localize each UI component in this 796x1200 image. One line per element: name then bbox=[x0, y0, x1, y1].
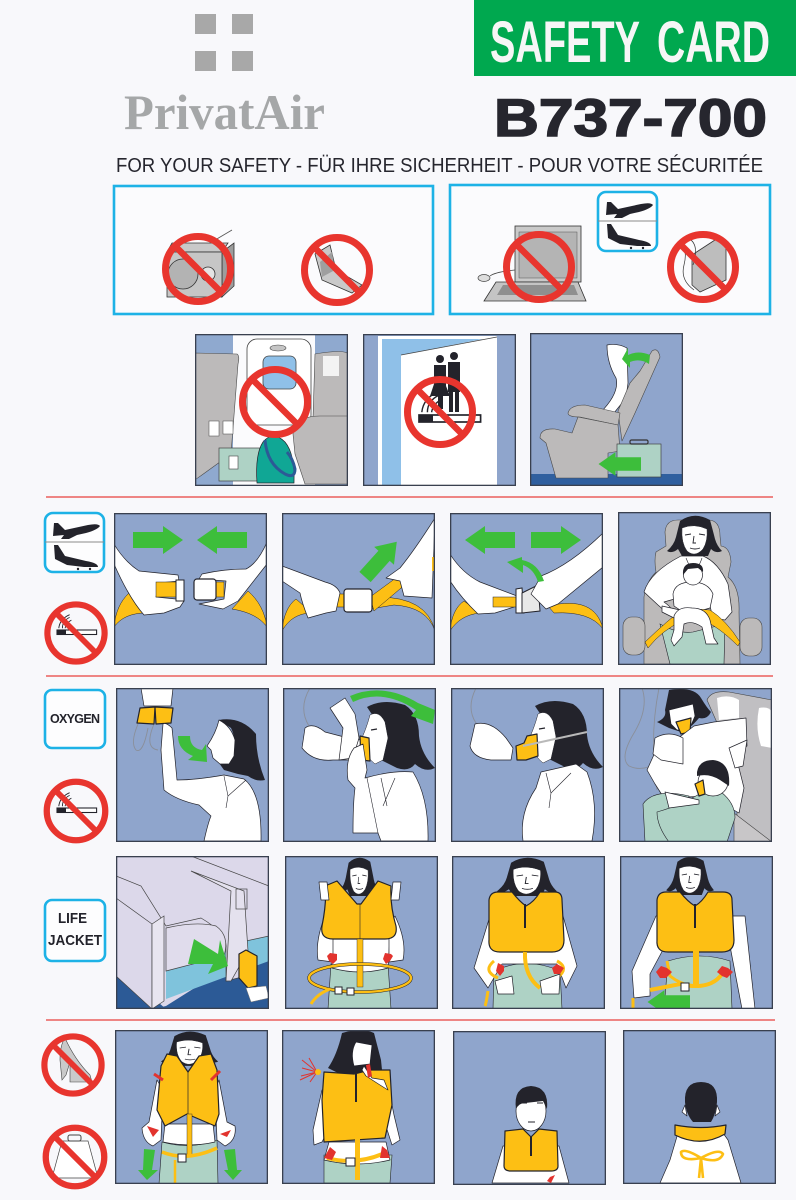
arrows bbox=[465, 526, 515, 554]
panel: child life jacket front bbox=[453, 1031, 606, 1185]
icon: oxygen label bbox=[45, 690, 105, 748]
prohibition sign bbox=[242, 370, 308, 434]
subtitle: FOR YOUR SAFETY - FÜR IHRE SICHERHEIT - POUR VOTRE SÉCURITÉE bbox=[116, 154, 763, 177]
panel: fasten life jacket belt bbox=[452, 856, 605, 1009]
icon: no smoking bbox=[47, 782, 105, 840]
icon: life jacket label bbox=[45, 900, 105, 961]
icon: takeoff and landing sign bbox=[598, 192, 657, 251]
panel: seatbelt release bbox=[450, 513, 603, 665]
arrow bbox=[178, 736, 207, 762]
icon: no high heels bbox=[44, 1036, 102, 1094]
icon: life jacket label: JACKET bbox=[48, 932, 102, 949]
icon: mobile device bbox=[304, 238, 370, 302]
icon: oxygen label: OXYGEN bbox=[50, 712, 100, 726]
icon: CD player bbox=[670, 234, 736, 300]
title banner: SAFETY bbox=[490, 10, 640, 75]
panel: life jacket location bbox=[116, 856, 269, 1009]
icon: radio bbox=[166, 230, 234, 302]
logo: PrivatAir squares bbox=[195, 14, 253, 71]
panel: seatbelt tighten bbox=[282, 513, 435, 665]
arrows bbox=[133, 526, 183, 554]
arrow bbox=[188, 939, 228, 974]
arrow bbox=[355, 533, 407, 586]
arrow bbox=[648, 990, 690, 1014]
panel: seatbelt with infant bbox=[618, 512, 771, 665]
icon: cigarette bbox=[419, 391, 481, 422]
panel: pull oxygen mask bbox=[116, 688, 269, 842]
arrow: stow bag bbox=[598, 452, 641, 476]
panel: keep exits and aisles clear bbox=[195, 334, 348, 486]
divider line 2 bbox=[46, 675, 773, 677]
panel: child life jacket back bbox=[623, 1030, 776, 1184]
title banner bbox=[474, 0, 796, 76]
panel: seat upright and bag under seat bbox=[530, 333, 683, 486]
panel: don oxygen mask bbox=[283, 688, 436, 842]
panel: tighten life jacket belt bbox=[620, 856, 773, 1009]
arrows bbox=[138, 1149, 158, 1180]
logo wordmark: PrivatAir bbox=[124, 84, 325, 140]
arrow bbox=[350, 690, 435, 724]
icon: no baggage bbox=[46, 1128, 104, 1186]
panel: prohibited radio and phone bbox=[114, 186, 433, 314]
divider line 3 bbox=[46, 1019, 775, 1021]
icon: laptop bbox=[478, 226, 586, 301]
prohibition sign bbox=[408, 380, 472, 444]
panel: don life jacket bbox=[285, 856, 438, 1009]
aircraft type heading: B737-700 bbox=[494, 89, 767, 148]
panel: seatbelt fasten bbox=[114, 513, 267, 665]
divider line 1 bbox=[46, 496, 773, 498]
icon: lavatory people bbox=[430, 352, 460, 412]
panel: inflate life jacket bbox=[115, 1030, 268, 1184]
icon: life jacket label: LIFE bbox=[58, 910, 87, 927]
panel: wearing oxygen mask bbox=[451, 688, 604, 842]
panel: whistle and light bbox=[282, 1030, 435, 1184]
icon: signal light burst bbox=[300, 1058, 317, 1082]
panel: assist child with oxygen mask bbox=[619, 688, 772, 842]
arrow: upright seat bbox=[622, 348, 650, 368]
icon: no smoking bbox=[47, 604, 105, 662]
panel: no smoking in lavatory bbox=[363, 334, 516, 486]
icon: fasten belt sign bbox=[45, 513, 104, 572]
panel: prohibited electronics during takeoff and landing bbox=[450, 185, 770, 314]
